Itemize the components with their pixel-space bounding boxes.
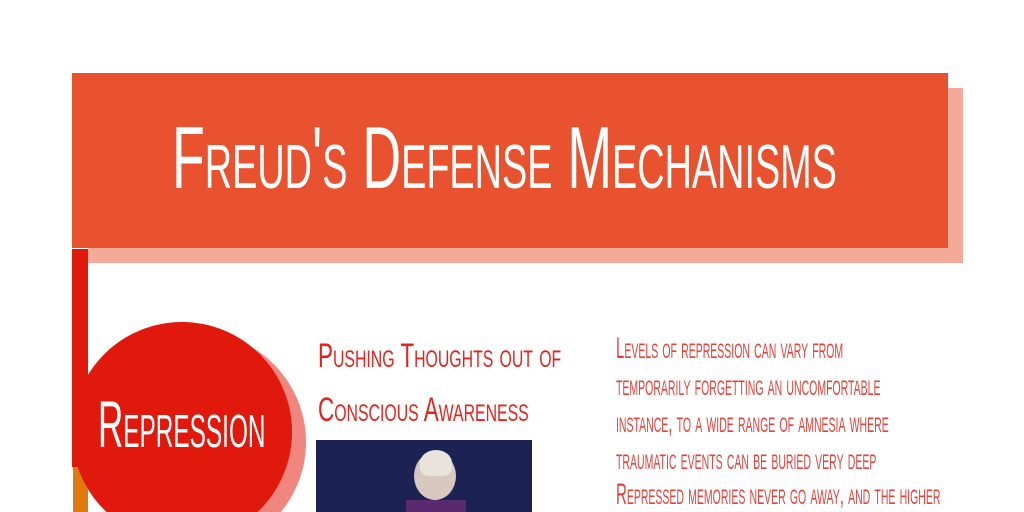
body text (616, 332, 940, 511)
title: Freud's Defense Mechanisms (172, 108, 837, 207)
body text: Levels of repression can vary from (616, 332, 843, 365)
circle: repression (78, 322, 306, 512)
subheading: Pushing Thoughts out of (318, 337, 561, 375)
title banner shadow (88, 88, 963, 263)
subheading: Conscious Awareness (318, 391, 529, 429)
red side bar (72, 249, 88, 467)
body text: temporarily forgetting an uncomfortable (616, 369, 881, 402)
body text: instance, to a wide range of amnesia where (616, 406, 889, 439)
body text: traumatic events can be buried very deep (616, 443, 876, 476)
title banner (72, 73, 948, 248)
subheading (318, 337, 561, 429)
heading: repression: Repression (98, 387, 266, 461)
body text: Repressed memories never go away, and the higher (616, 478, 940, 511)
image: frozen still (316, 440, 532, 512)
orange side bar (73, 467, 88, 512)
